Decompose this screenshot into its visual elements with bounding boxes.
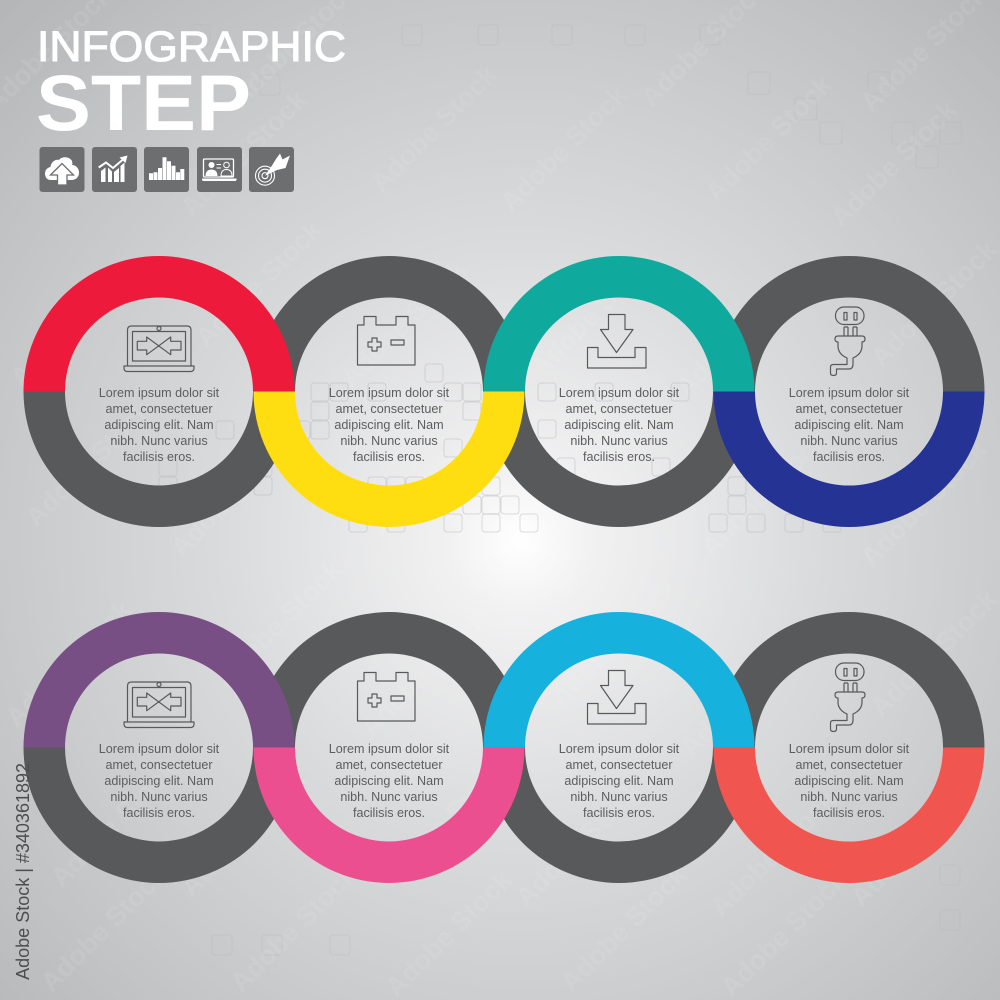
ring 1 lower grey (24, 392, 294, 527)
icon: plug row 2 (830, 663, 865, 732)
text: Adobe Stock (210, 554, 348, 693)
title: STEP: STEP (36, 58, 251, 147)
text: Adobe Stock (495, 424, 633, 563)
text: Adobe Stock (675, 624, 813, 763)
text: Adobe Stock (825, 94, 963, 233)
text block 5: adipiscing elit. Nam (104, 774, 214, 788)
icon: plug row 1 (830, 307, 865, 376)
ring 5 lower grey (24, 748, 294, 883)
text block 7: facilisis eros. (583, 806, 655, 820)
text: Adobe Stock (175, 764, 313, 903)
text block 3: amet, consectetuer (565, 402, 673, 416)
ring 5 upper purple (24, 612, 294, 748)
icon: battery row 1 (358, 316, 415, 365)
text: Adobe Stock (355, 604, 493, 743)
text block 6: Lorem ipsum dolor sit (329, 742, 450, 756)
text block 7: amet, consectetuer (565, 758, 673, 772)
text: Adobe Stock (175, 84, 313, 223)
text: Adobe Stock (555, 859, 693, 998)
ring 4 lower navy (714, 392, 984, 527)
ring 8 lower coral (714, 748, 984, 883)
icon: download row 1 (588, 314, 646, 368)
ring 4 upper grey (714, 256, 984, 392)
text: Adobe Stock (525, 244, 663, 383)
text block 8: facilisis eros. (813, 806, 885, 820)
icon: battery row 2 (358, 672, 415, 721)
text block 1: facilisis eros. (123, 450, 195, 464)
text block 6: amet, consectetuer (335, 758, 443, 772)
text block 5: facilisis eros. (123, 806, 195, 820)
text: Adobe Stock (375, 754, 513, 893)
text: Adobe Stock (545, 574, 683, 713)
icon row (40, 147, 294, 192)
ring 6 lower pink (254, 748, 524, 883)
text: Adobe Stock (20, 394, 158, 533)
text block 3: facilisis eros. (583, 450, 655, 464)
text block 3: adipiscing elit. Nam (564, 418, 674, 432)
text block 8: amet, consectetuer (795, 758, 903, 772)
stock id side text: Adobe Stock | #340361892 (13, 763, 33, 980)
text: Adobe Stock (865, 234, 1000, 373)
text block 7: adipiscing elit. Nam (564, 774, 674, 788)
text: Adobe Stock (35, 859, 173, 998)
ring 1 upper red (24, 256, 294, 392)
text block 2: amet, consectetuer (335, 402, 443, 416)
icon: cloud upload (40, 147, 84, 192)
text: Adobe Stock (715, 864, 853, 1000)
text: Adobe Stock (495, 79, 633, 218)
text: Adobe Stock (365, 59, 503, 198)
text: Adobe Stock (365, 404, 503, 543)
text block 6: facilisis eros. (353, 806, 425, 820)
text: Adobe Stock (700, 69, 838, 208)
text block 1: nibh. Nunc varius (110, 434, 208, 448)
text block 3: Lorem ipsum dolor sit (559, 386, 680, 400)
ring 7 upper cyan (484, 612, 754, 748)
text: Adobe Stock (855, 434, 993, 573)
text: Adobe Stock (670, 264, 808, 403)
ring 2 upper grey (254, 256, 524, 392)
row 1 rings (24, 256, 984, 527)
text: Adobe Stock (335, 254, 473, 393)
text block 4: adipiscing elit. Nam (794, 418, 904, 432)
text: Adobe Stock (705, 784, 843, 923)
text block 4: Lorem ipsum dolor sit (789, 386, 910, 400)
icon: rising chart (92, 147, 137, 192)
text block 5: nibh. Nunc varius (110, 790, 208, 804)
text block 4: nibh. Nunc varius (800, 434, 898, 448)
ring 6 upper grey (254, 612, 524, 748)
text block 1: Lorem ipsum dolor sit (99, 386, 220, 400)
text: Adobe Stock (45, 754, 183, 893)
text: Adobe Stock (380, 864, 518, 1000)
text block 2: nibh. Nunc varius (340, 434, 438, 448)
text: Adobe Stock (165, 424, 303, 563)
text block 4: amet, consectetuer (795, 402, 903, 416)
text: Adobe Stock (865, 584, 1000, 723)
icon: download row 2 (588, 670, 646, 724)
text block 6: adipiscing elit. Nam (334, 774, 444, 788)
icon: target with arrow (249, 147, 294, 192)
ring 3 lower grey (484, 392, 754, 527)
text block 8: adipiscing elit. Nam (794, 774, 904, 788)
ring 8 upper grey (714, 612, 984, 748)
text block 1: adipiscing elit. Nam (104, 418, 214, 432)
text: Adobe Stock (845, 774, 983, 913)
text block 5: Lorem ipsum dolor sit (99, 742, 220, 756)
text block 4: facilisis eros. (813, 450, 885, 464)
icon: bar chart (144, 147, 189, 192)
row 2 rings (24, 612, 984, 883)
title: INFOGRAPHIC: INFOGRAPHIC (37, 23, 346, 71)
ring 7 lower grey (484, 748, 754, 883)
text block 7: Lorem ipsum dolor sit (559, 742, 680, 756)
text: Adobe Stock (5, 254, 143, 393)
icon: laptop row 1 (124, 326, 194, 372)
text: Adobe Stock (510, 774, 648, 913)
text block 7: nibh. Nunc varius (570, 790, 668, 804)
icon: laptop row 2 (124, 682, 194, 728)
ring 3 upper teal (484, 256, 754, 392)
icon: laptop with people (197, 147, 242, 192)
text block 1: amet, consectetuer (105, 402, 213, 416)
text block 2: adipiscing elit. Nam (334, 418, 444, 432)
text block 5: amet, consectetuer (105, 758, 213, 772)
text: Adobe Stock (190, 214, 328, 353)
text: Adobe Stock (695, 424, 833, 563)
text: Adobe Stock (0, 594, 138, 733)
text block 8: Lorem ipsum dolor sit (789, 742, 910, 756)
ring 2 lower yellow (254, 392, 524, 527)
text block 2: Lorem ipsum dolor sit (329, 386, 450, 400)
text: Adobe Stock (225, 859, 363, 998)
text block 6: nibh. Nunc varius (340, 790, 438, 804)
text block 3: nibh. Nunc varius (570, 434, 668, 448)
text block 8: nibh. Nunc varius (800, 790, 898, 804)
text block 2: facilisis eros. (353, 450, 425, 464)
